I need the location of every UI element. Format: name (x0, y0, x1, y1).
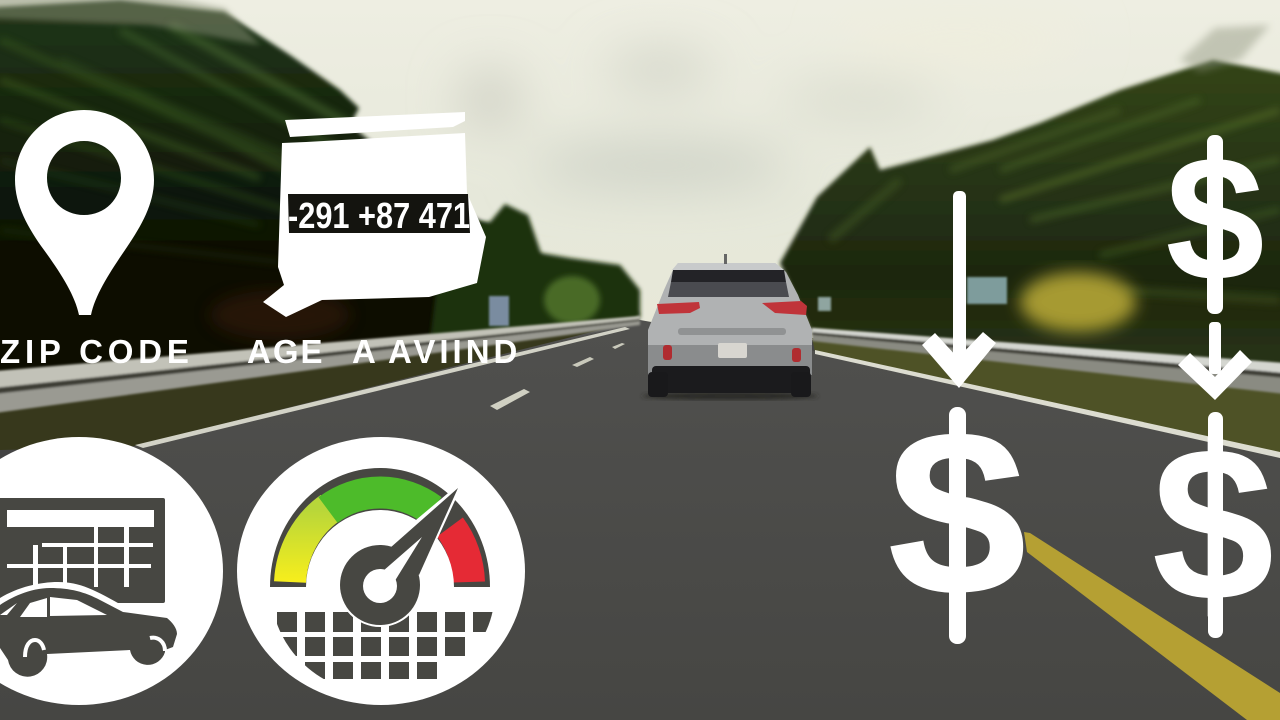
calendar table (0, 498, 165, 603)
left trees (0, 0, 640, 385)
label: age and driving: AGE (247, 333, 325, 370)
label: age and driving: AVIIND (388, 333, 521, 370)
road markings (135, 327, 1280, 720)
left guardrail (0, 316, 640, 413)
road surface (0, 320, 1280, 720)
right verge (812, 338, 1280, 458)
arrow: left price down (922, 191, 996, 388)
dollar sign: right lower: $ (1152, 401, 1274, 647)
gauge grid (277, 612, 493, 679)
yellow bush (1020, 272, 1136, 332)
icon: odometer document (263, 112, 486, 317)
icon: location pin (15, 110, 154, 315)
clouds (460, 20, 1080, 187)
car silhouette (0, 582, 177, 677)
dollar sign: right upper: $ (1166, 119, 1264, 318)
odometer digits: -291 +87 471 (288, 195, 470, 236)
sky (0, 0, 1280, 340)
label: age and driving: A (352, 333, 376, 370)
right guardrail (812, 328, 1280, 394)
label: zip code: ZIP CODE (0, 333, 194, 370)
dollar sign: left lower: $ (888, 382, 1026, 645)
left verge (0, 322, 640, 450)
icon: credit score gauge badge (237, 437, 525, 705)
right trees (780, 25, 1280, 370)
gauge dial (270, 468, 490, 587)
icon: calendar and car badge (0, 437, 223, 705)
arrow: right price down (1178, 322, 1252, 400)
gauge needle and hub (338, 488, 458, 627)
roadside sign (967, 277, 1007, 304)
car (642, 254, 818, 400)
